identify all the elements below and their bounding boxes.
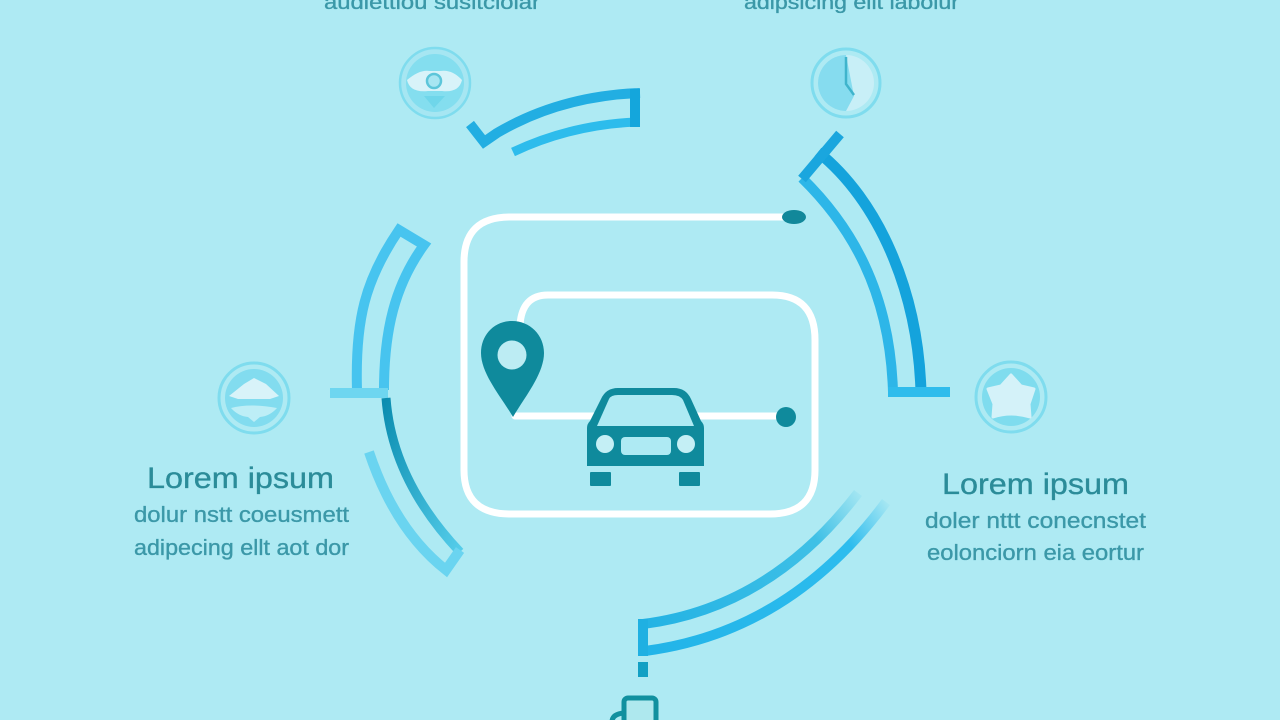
icon: top left badge <box>400 48 470 118</box>
icon: location pin <box>481 321 544 417</box>
route end dot bottom <box>776 407 796 427</box>
icon: right star badge <box>976 362 1046 432</box>
right description: eolonciorn eia eortur <box>927 540 1144 565</box>
arc: top <box>470 89 640 152</box>
icon: left badge <box>219 363 289 433</box>
arc: bottom <box>638 493 886 677</box>
icon: car <box>587 388 704 486</box>
left text block <box>134 462 349 560</box>
right heading: Lorem ipsum <box>942 468 1129 501</box>
left heading: Lorem ipsum <box>147 462 334 495</box>
icon: top right clock <box>812 49 880 117</box>
right text block <box>925 468 1146 565</box>
arc: left <box>330 230 460 570</box>
icon: truck cut off at bottom <box>612 698 656 720</box>
left description: dolur nstt coeusmett <box>134 502 349 527</box>
route end dot top <box>782 210 806 224</box>
route: white road <box>464 217 815 514</box>
left description <box>134 502 349 560</box>
arc: right <box>802 134 950 392</box>
right description: doler nttt conecnstet <box>925 508 1146 533</box>
left description: adipecing ellt aot dor <box>134 535 349 560</box>
right description <box>925 508 1146 565</box>
